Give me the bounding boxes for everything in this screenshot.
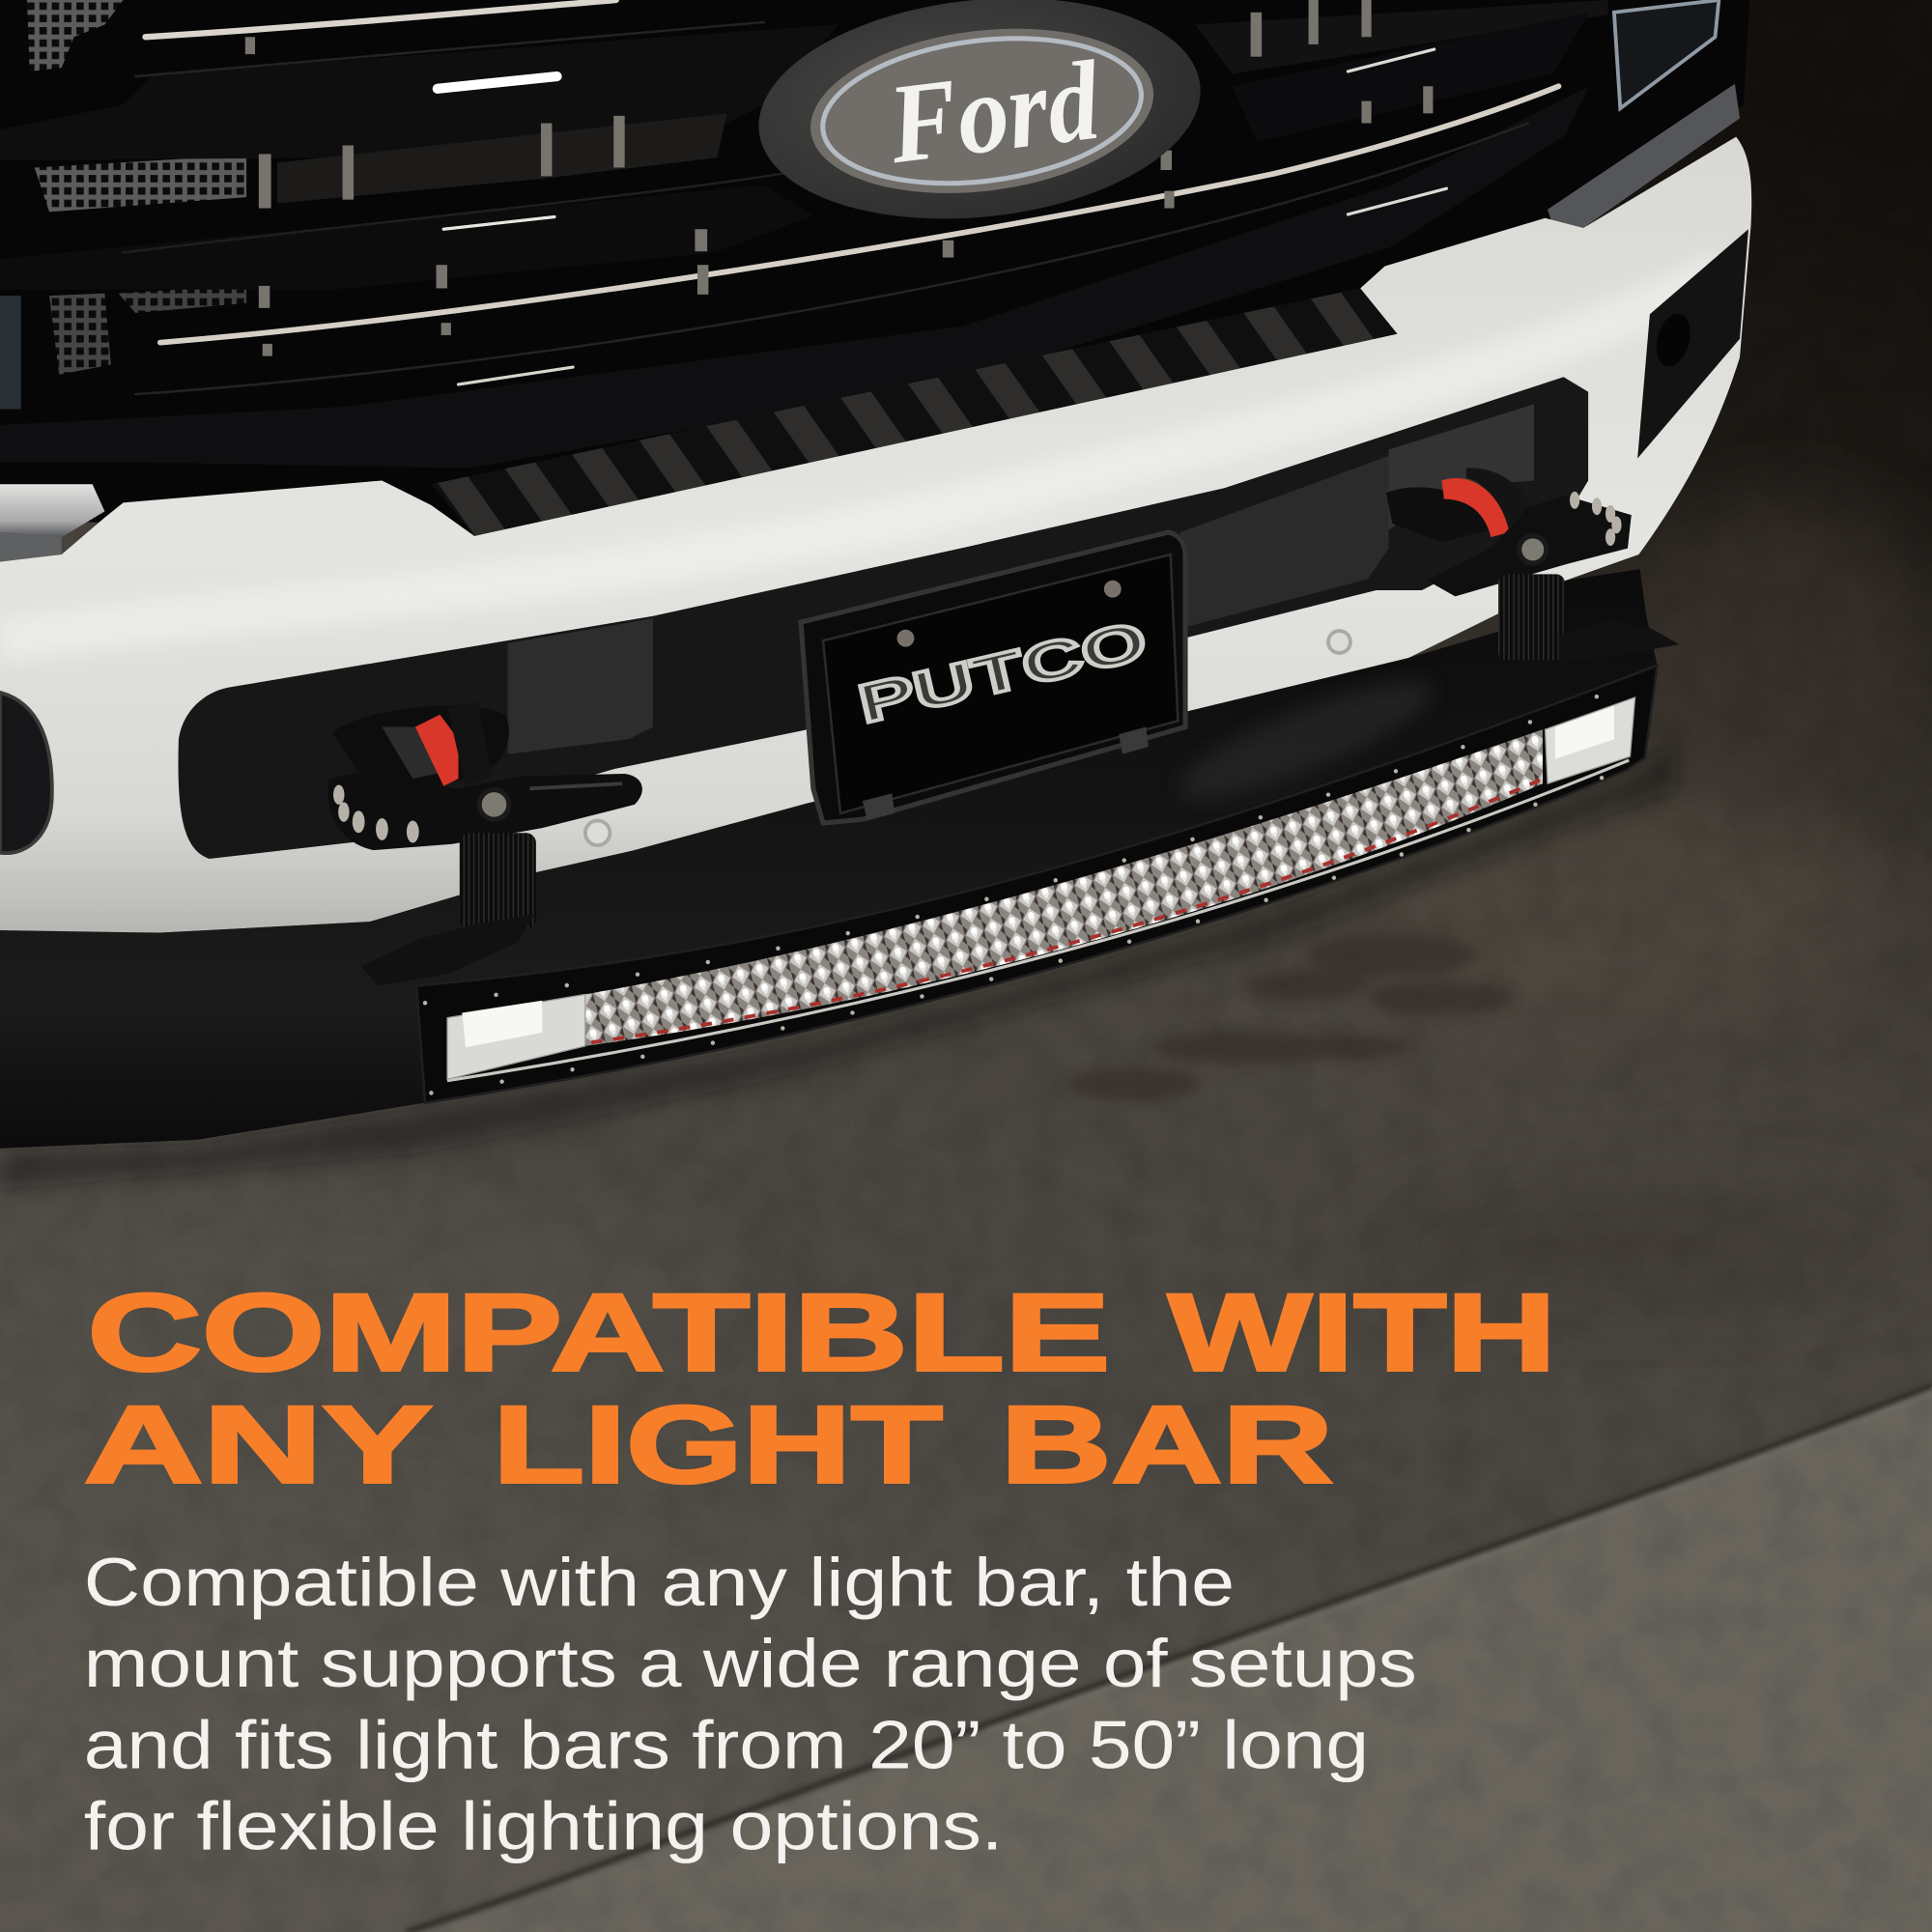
headline [84,1271,1556,1506]
body copy: and fits light bars from 20” to 50” long [84,1706,1369,1782]
grille posts [245,0,1433,356]
silver strip [447,760,1629,1081]
right chrome side trim [1548,84,1740,232]
right mount bracket [1386,468,1680,663]
right plate arm [1427,496,1632,596]
LED array [585,729,1543,1046]
left plate arm [327,770,642,850]
left fog light housing [0,693,52,853]
left lamp lower trim [0,532,62,562]
body copy: mount supports a wide range of setups [84,1625,1417,1701]
left shackle [332,702,509,788]
headline: ANY [84,1383,433,1506]
Ford oval badge [748,0,1211,240]
body copy: for flexible lighting options. [84,1788,1003,1864]
right bolts [1570,492,1622,546]
truck upper grille [0,0,1749,542]
left lower foot [361,914,535,985]
left mount bracket [327,702,642,985]
right shackle [1386,468,1534,542]
left lamp strip [0,296,21,409]
right fog lens [1651,310,1695,370]
grille mesh panels [27,0,246,375]
license plate [801,532,1185,823]
red reflector row [591,780,1540,1042]
plate bolts [897,581,1122,647]
recess right upper panel [1389,404,1534,529]
top screws [425,685,1627,1003]
headline: LIGHT [493,1383,943,1506]
bottom screws [431,770,1620,1093]
lower black air dam [0,569,1658,1149]
left flood module [447,994,585,1079]
right fog light housing [1637,229,1748,458]
Ford script logo: Ford [881,37,1107,187]
lower grille recess [179,377,1588,859]
recess right insert [1180,456,1389,629]
left knurled post [460,833,536,929]
left bolts [333,784,419,842]
body copy [84,1544,1417,1864]
floor crack [407,1386,1932,1932]
LED light bar [416,666,1658,1103]
parking sensors [585,631,1350,845]
plate clips [863,727,1149,820]
chrome strips [124,0,1559,394]
right knurled post [1498,574,1565,661]
headline: BAR [1001,1383,1333,1506]
headline: WITH [1168,1271,1556,1394]
air dam sheen [1169,661,1443,817]
right flood module [1545,697,1635,783]
bar housing [416,666,1658,1103]
shadow under air dam [0,739,1676,1189]
left arm slot [529,783,622,788]
left lamp housing [0,484,104,537]
bumper highlight band [0,271,1725,640]
grille vent openings [277,113,727,203]
white front bumper [0,137,1751,933]
right lower foot [1559,620,1680,663]
recess left insert [508,618,653,754]
headline: COMPATIBLE [88,1271,1110,1394]
floor stains [1065,933,1516,1101]
plate brand text: PUTCO [853,610,1152,734]
glossy grille bars [0,0,1608,469]
body copy: Compatible with any light bar, the [84,1544,1235,1620]
right headlight [1614,0,1719,108]
hood scoop vent [431,288,1397,536]
